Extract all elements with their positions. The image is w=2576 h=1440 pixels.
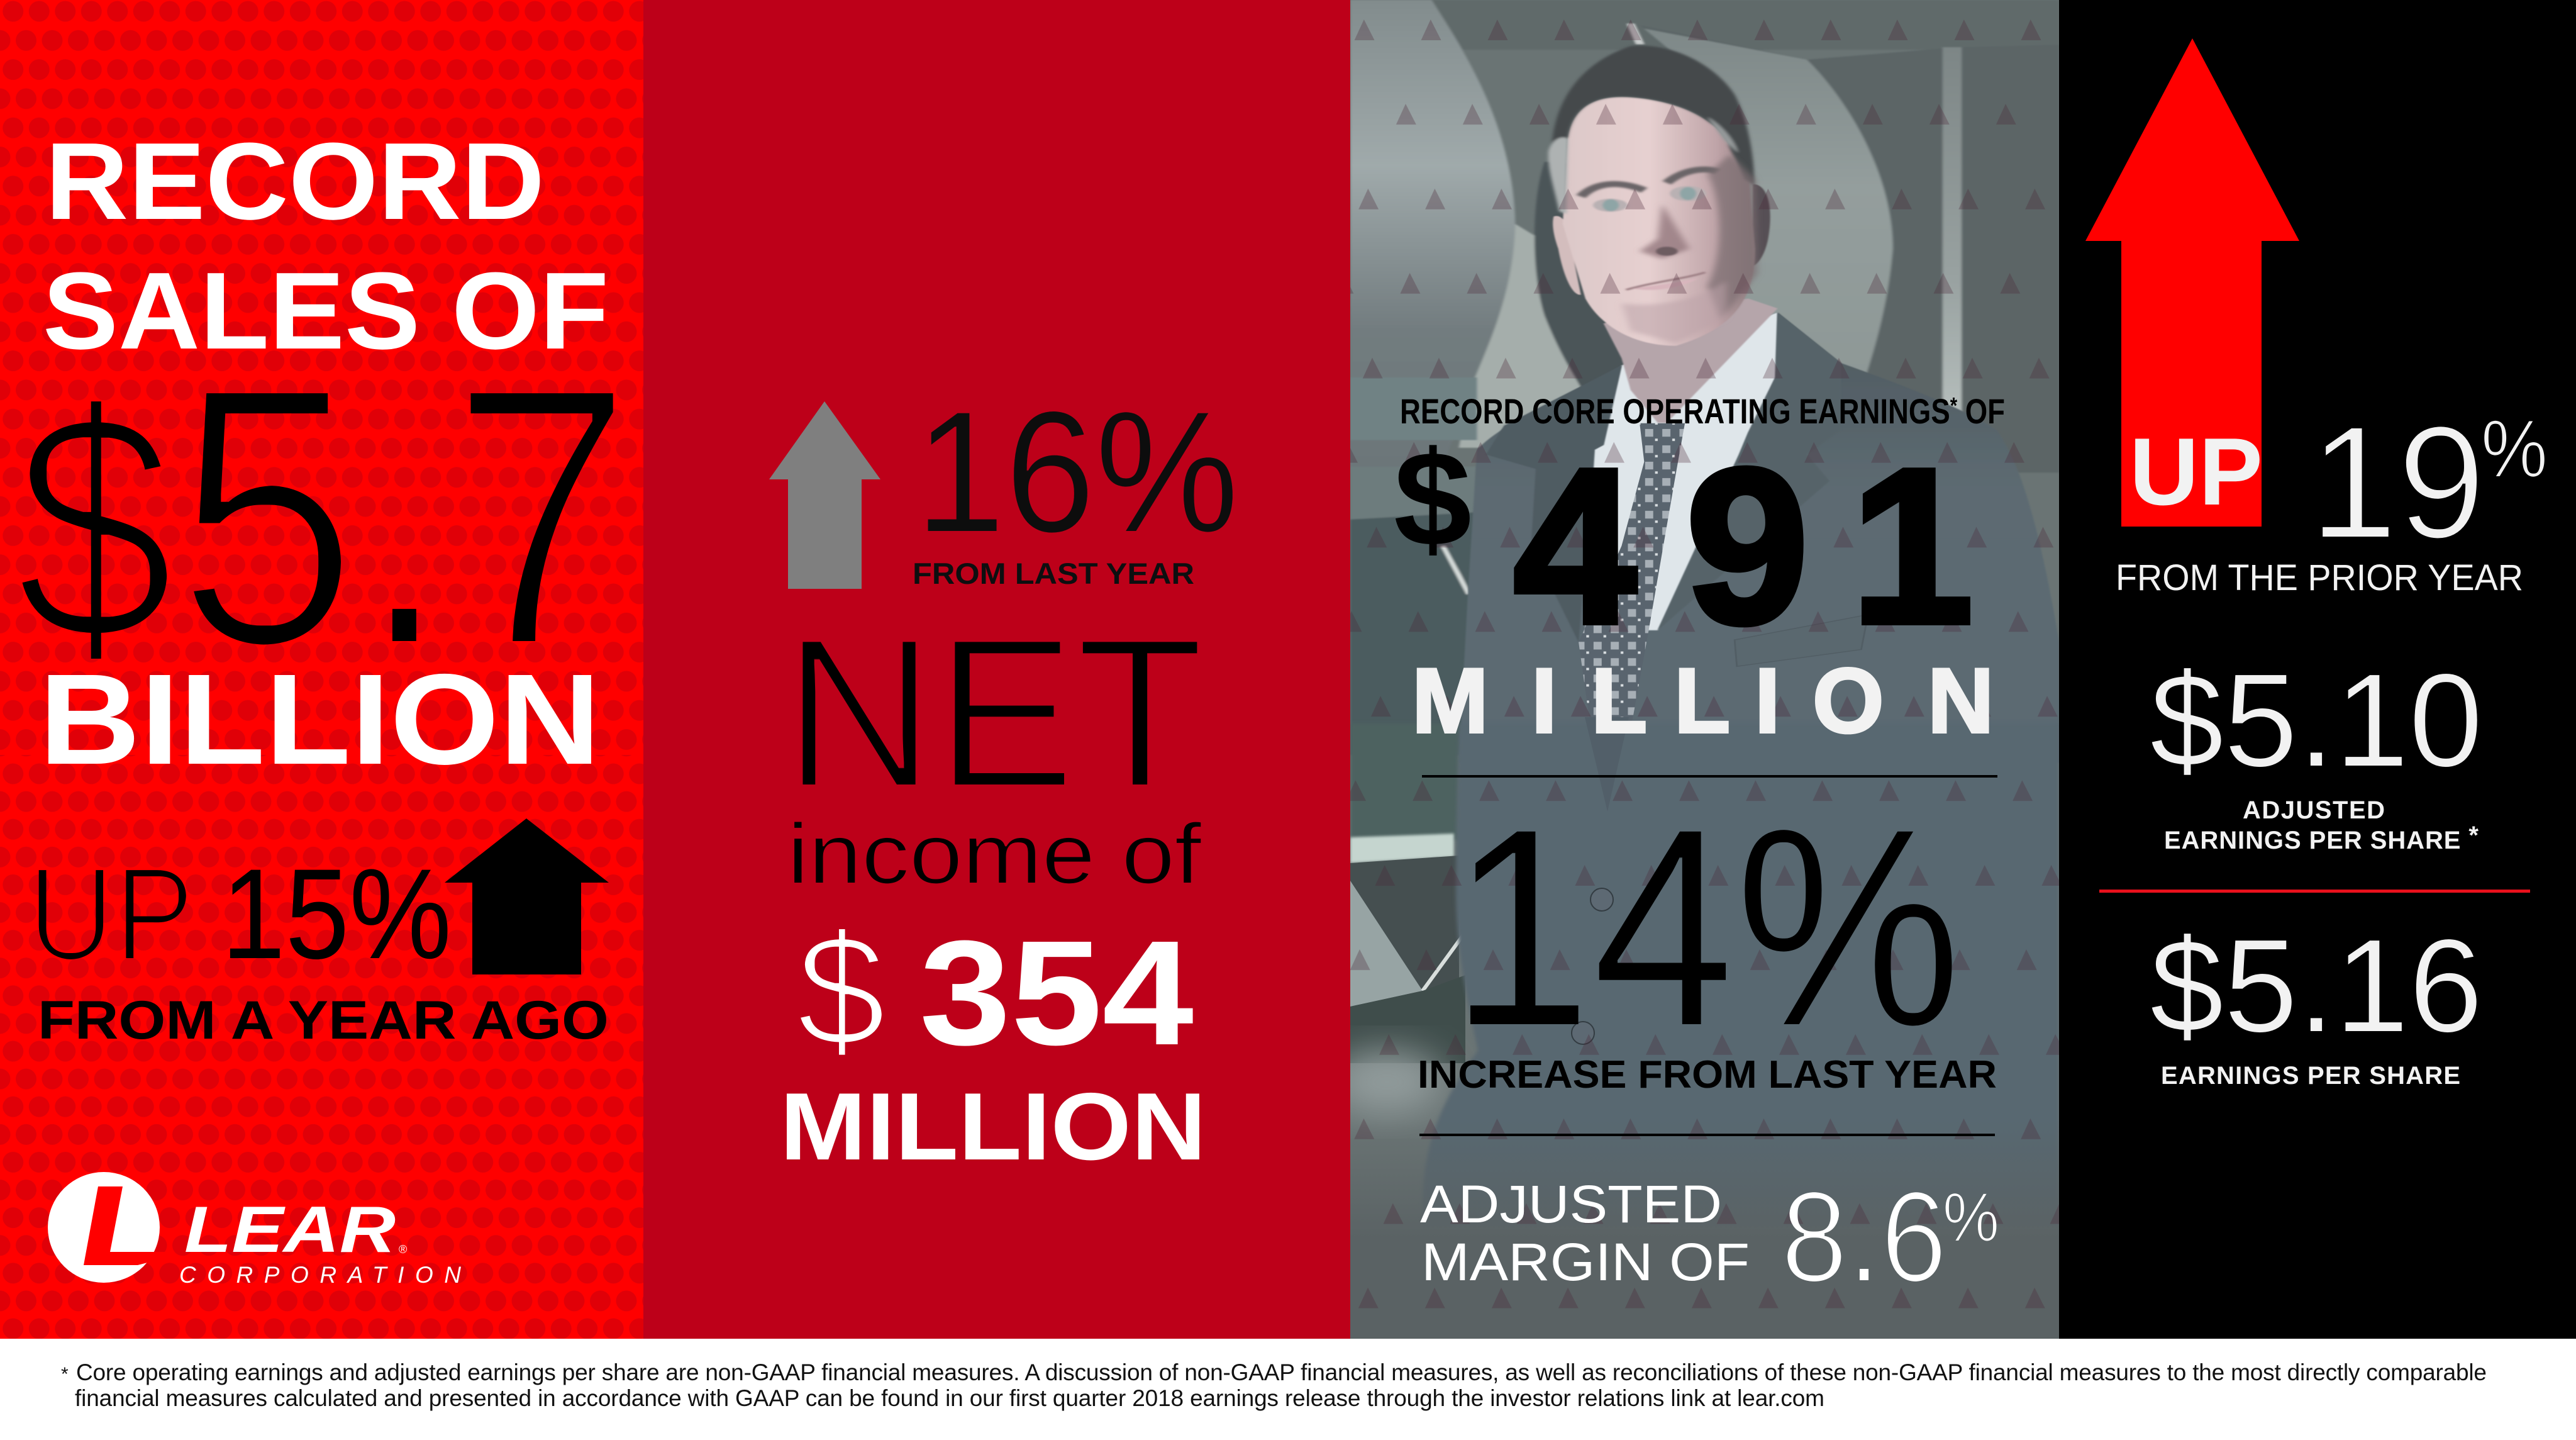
footnote bbox=[61, 1359, 2487, 1411]
photo: executive portrait bbox=[1330, 0, 2059, 1339]
number: 14%: 14% bbox=[1450, 769, 1962, 1086]
photo background: lower left dark bbox=[1350, 377, 1477, 755]
icon: black up arrow bbox=[445, 818, 609, 974]
label: billion: BILLION bbox=[39, 647, 601, 791]
text: adjusted margin of: ADJUSTED bbox=[1420, 1175, 1722, 1234]
heading: record sales of bbox=[43, 120, 609, 372]
number: percent sign: % bbox=[2481, 403, 2548, 494]
text: from last year: FROM LAST YEAR bbox=[913, 557, 1194, 590]
text: 16%: 16% bbox=[915, 376, 1239, 569]
text: adjusted margin of: MARGIN OF bbox=[1421, 1232, 1750, 1292]
panel: earnings per share bbox=[2059, 0, 2576, 1339]
number: percent sign: % bbox=[1943, 1179, 1999, 1256]
text: from the prior year: FROM THE PRIOR YEAR bbox=[2116, 557, 2523, 598]
footnote: financial measures calculated and presented in accordance with GAAP can be found in our first quarter 2018 earnings release through the investor relations link at lear.com bbox=[75, 1385, 1824, 1411]
text: dollar sign: $ bbox=[796, 901, 886, 1080]
man: lower jacket bbox=[1330, 717, 2059, 1339]
panel: core operating earnings bbox=[1330, 0, 2059, 1339]
text: record core operating earnings: * bbox=[1950, 393, 1957, 418]
big number: $5.7: 5.7 bbox=[175, 310, 633, 724]
man: head bbox=[1548, 46, 1777, 423]
text: 15%: 15% bbox=[221, 842, 452, 986]
text: record core operating earnings: RECORD CORE OPERATING EARNINGS bbox=[1400, 391, 2076, 431]
number: 354: 354 bbox=[919, 910, 1194, 1076]
man: jacket, shirt, tie bbox=[1459, 313, 2059, 762]
number: 491: 491 bbox=[1514, 423, 1974, 669]
number: dollar sign: $ bbox=[1394, 423, 1472, 574]
logo: lear corporation: ® bbox=[399, 1243, 407, 1256]
pattern: triangle overlay bbox=[1350, 0, 2059, 1339]
text: adjusted earnings per share: * bbox=[2461, 822, 2479, 849]
text: adjusted earnings per share bbox=[2164, 796, 2479, 854]
footnote: * bbox=[61, 1364, 69, 1385]
label: million: MILLION bbox=[1412, 649, 1994, 752]
divider bbox=[1419, 1134, 1995, 1136]
text: increase from last year: INCREASE FROM LAST YEAR bbox=[1418, 1053, 1997, 1097]
footnote: Core operating earnings and adjusted earnings per share are non-GAAP financial measures. A discussion of non-GAAP financial measures, as well as reconciliations of these non-GAAP financial measures to the most directly comparable bbox=[76, 1359, 2487, 1385]
text: from a year ago: FROM A YEAR AGO bbox=[38, 990, 609, 1051]
logo: lear corporation bbox=[48, 1172, 461, 1288]
logo: lear corporation: CORPORATION bbox=[179, 1262, 461, 1288]
label: million: MILLION bbox=[780, 1073, 1206, 1180]
number: $5.16: $5.16 bbox=[2150, 911, 2483, 1060]
photo background: curved sculpture bbox=[1350, 0, 2059, 472]
text: up: UP bbox=[28, 839, 194, 988]
text: up: UP bbox=[2129, 418, 2263, 525]
text: record core operating earnings: OF bbox=[1957, 391, 2005, 431]
number: 8.6: 8.6 bbox=[1781, 1164, 1947, 1309]
text: net: NET bbox=[783, 593, 1204, 833]
panel: net income bbox=[643, 0, 1350, 1339]
text: adjusted margin of bbox=[1420, 1175, 1750, 1292]
divider bbox=[1422, 775, 1997, 778]
text: adjusted earnings per share: EARNINGS PER SHARE bbox=[2164, 827, 2460, 854]
number: 19: 19 bbox=[2309, 393, 2485, 572]
text: income of: income of bbox=[787, 806, 1201, 901]
logo: lear corporation: LEAR bbox=[184, 1193, 396, 1266]
number: $5.10: $5.10 bbox=[2150, 645, 2483, 795]
text: adjusted earnings per share: ADJUSTED bbox=[2243, 796, 2385, 824]
text: earnings per share: EARNINGS PER SHARE bbox=[2161, 1062, 2460, 1090]
heading: record sales of: SALES OF bbox=[43, 249, 609, 372]
big number: $5.7: $ bbox=[14, 344, 175, 710]
heading: record sales of: RECORD bbox=[45, 120, 545, 242]
icon: red up arrow bbox=[2085, 38, 2299, 527]
divider: red bbox=[2099, 890, 2530, 893]
panel: record sales bbox=[0, 0, 643, 1339]
icon: grey up arrow bbox=[769, 401, 880, 589]
